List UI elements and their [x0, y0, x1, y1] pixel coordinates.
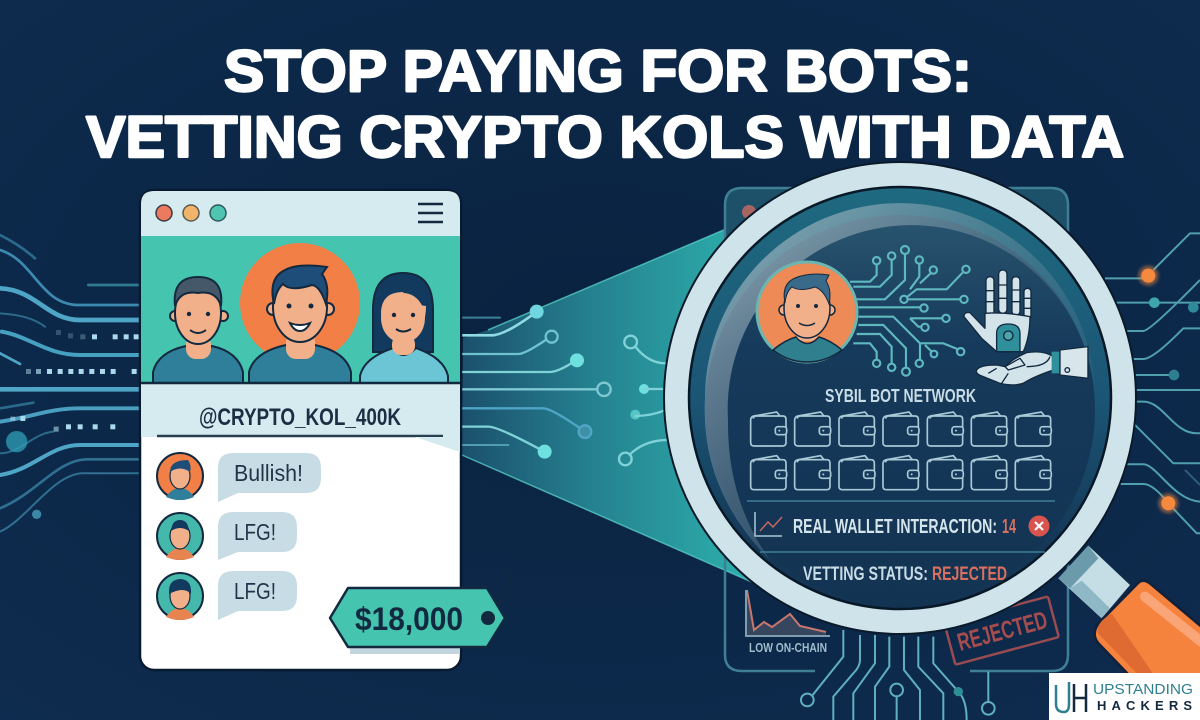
magnifying glass [664, 162, 1200, 687]
chat comment: LFG second [157, 571, 297, 620]
lens avatar [757, 262, 857, 362]
real wallet interaction row: REAL WALLET INTERACTION: [793, 516, 997, 538]
chat comment: LFG second: LFG! [234, 578, 276, 604]
left circuit traces [0, 235, 140, 532]
beam circuit traces [458, 305, 668, 465]
handle [1058, 546, 1200, 687]
price tag [330, 568, 510, 654]
rejected stamp: REJECTED [954, 606, 1051, 657]
lens interior [689, 187, 1111, 609]
circuit from avatar [850, 246, 970, 376]
chat comment: Bullish [157, 453, 321, 502]
panel: social profile window [140, 190, 461, 670]
title [86, 39, 1124, 170]
logo: upstanding hackers [1049, 673, 1200, 720]
lens rim [664, 162, 1136, 634]
chat comment: Bullish: Bullish! [234, 460, 303, 486]
person left [153, 277, 243, 383]
chat comment: LFG [157, 512, 297, 560]
real wallet interaction row [747, 501, 1055, 552]
wallet grid [751, 412, 1051, 490]
logo: upstanding hackers: UPSTANDING [1093, 681, 1193, 698]
handle band [141, 383, 460, 452]
logo: upstanding hackers: HACKERS [1097, 698, 1192, 713]
real wallet interaction row: 14 [1002, 516, 1017, 538]
profile banner with three people [141, 236, 460, 383]
robot hands [964, 270, 1088, 385]
low on-chain chart: LOW ON-CHAIN [749, 640, 827, 655]
chat comment: LFG: LFG! [234, 519, 276, 545]
label: sybil bot network: SYBIL BOT NETWORK [825, 386, 976, 406]
panel: on-chain dashboard behind lens [725, 188, 1068, 671]
right circuit traces [1070, 233, 1200, 533]
handle band: @CRYPTO_KOL_400K [199, 404, 402, 431]
vetting status: VETTING STATUS: [803, 564, 928, 585]
light beam [462, 221, 770, 590]
low on-chain chart [746, 590, 830, 655]
rejected stamp [945, 596, 1059, 665]
person right [360, 273, 448, 383]
vetting status: REJECTED [932, 564, 1007, 585]
bottom circuit traces [801, 630, 995, 720]
title: STOP PAYING FOR BOTS: [224, 39, 972, 104]
title: VETTING CRYPTO KOLS WITH DATA [86, 105, 1124, 170]
window header [141, 191, 460, 236]
person centre [249, 266, 351, 383]
price tag: $18,000 [355, 601, 463, 637]
